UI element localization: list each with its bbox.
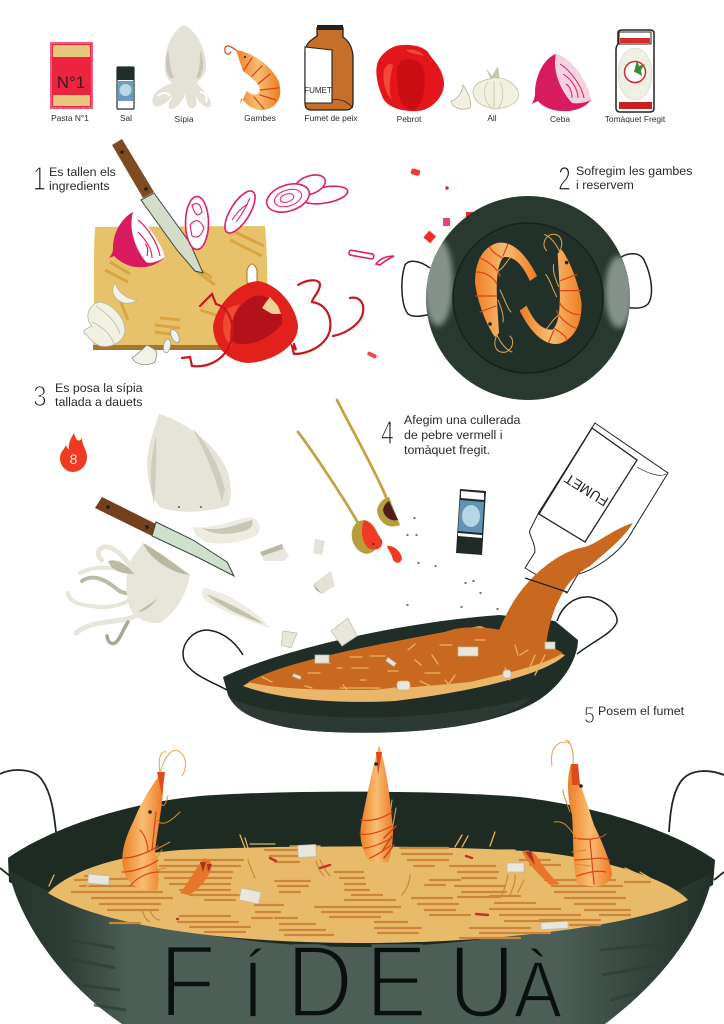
noodles in sauce [262,640,545,690]
ingredient: pasta packet: N°1 [57,73,85,92]
cooked noodle base [243,626,565,702]
step 4: add paprika and tomato [298,400,668,609]
ingredient: garlic [451,66,519,123]
step 2 heading [558,161,692,198]
prawn left [475,243,537,352]
ingredient: fish stock bottle [304,25,358,123]
ingredient: fish stock bottle: FUMET [304,86,332,95]
ingredient: cuttlefish: Sípia [174,114,194,124]
step 1 heading [33,161,116,198]
ingredient: salt [117,67,134,123]
right standing prawn [522,740,612,887]
step 3 heading: tallada a dauets [55,395,142,409]
cuttlefish hood [147,414,231,512]
ingredient: salt: Sal [120,113,132,123]
step 2: fry the prawns [402,161,692,400]
pan title [159,923,562,1024]
pouring stock [494,523,633,645]
knife [95,497,234,576]
step 5 heading [584,703,685,728]
middle standing prawn [360,745,396,862]
step 3 heading [33,380,143,412]
step 1 heading: 1 [33,161,46,198]
noodle bed [48,832,688,943]
pan handles [402,254,651,316]
pan body [223,615,578,733]
final dish: big paella pan [0,740,724,1024]
cutting board [93,226,268,350]
round pan seen from above [423,196,633,400]
pan handles [183,597,617,690]
flying pepper strips [292,280,363,354]
flying fragments [349,168,474,359]
step 4 heading: Afegim una cullerada [404,413,521,427]
onion slices [186,171,349,250]
ingredients row [51,25,666,124]
step 3: add the cuttlefish [33,380,335,643]
ingredient: cuttlefish [152,25,211,124]
spoon with tomato [298,432,382,557]
cuttlefish cubes [88,845,568,930]
two prawns in pan [475,234,582,352]
step 1 heading: Es tallen els [49,165,116,179]
pan exterior [9,870,713,1024]
step 4 heading [381,413,521,457]
ingredient: pepper [376,45,444,124]
cuttlefish cubes [281,618,555,690]
cuttlefish rings and pieces [193,517,335,628]
ingredient: fish stock bottle: Fumet de peix [304,113,358,123]
ingredient: garlic: All [487,113,497,123]
step 4 heading: 4 [381,415,394,452]
ingredient: onion half: Ceba [550,114,570,124]
salt shaker and falling grains [373,489,498,609]
step 4 heading: de pebre vermell i [404,428,502,442]
ingredient: fried tomato jar: Tomàquet Fregit [605,114,666,124]
tilted fumet bottle: FUMET [561,470,611,510]
step 3 heading: Es posa la sípia [55,381,143,395]
ingredient: onion half [532,54,591,124]
left standing prawn [122,750,212,895]
tilted fumet bottle [525,423,668,593]
tomato drop [387,546,402,563]
step 2 heading: i reservem [576,178,634,192]
step 1 heading: ingredients [49,179,110,193]
step 4 heading: tomàquet fregit. [404,443,490,457]
flame icon with heat level 8: 8 [70,451,78,467]
cuttlefish tentacles [68,543,190,643]
step 2 heading: 2 [558,161,571,198]
garlic and cloves [84,283,181,365]
ingredient: prawn [225,46,280,123]
frying pan with sauce [183,523,633,733]
flame icon with heat level 8 [60,433,87,472]
ingredient: prawn: Gambes [244,113,276,123]
ingredient: pepper: Pebrot [397,114,422,124]
ingredient: pasta packet: Pasta N°1 [51,113,89,123]
ingredient: fried tomato jar [605,30,666,124]
prawn right [520,234,582,344]
step 2 heading: Sofregim les gambes [576,164,692,178]
spoon with paprika [337,400,400,527]
step 3 heading: 3 [33,380,47,412]
knife [112,139,203,273]
pan interior [8,792,715,950]
step 5 heading: 5 [584,703,595,728]
ingredient: pasta packet [51,43,92,123]
pan handles [0,770,724,880]
step 1: cut the ingredients [33,139,474,366]
onion half on board [109,212,165,267]
step 5 heading: Posem el fumet [598,704,685,718]
red pepper half [182,281,298,366]
